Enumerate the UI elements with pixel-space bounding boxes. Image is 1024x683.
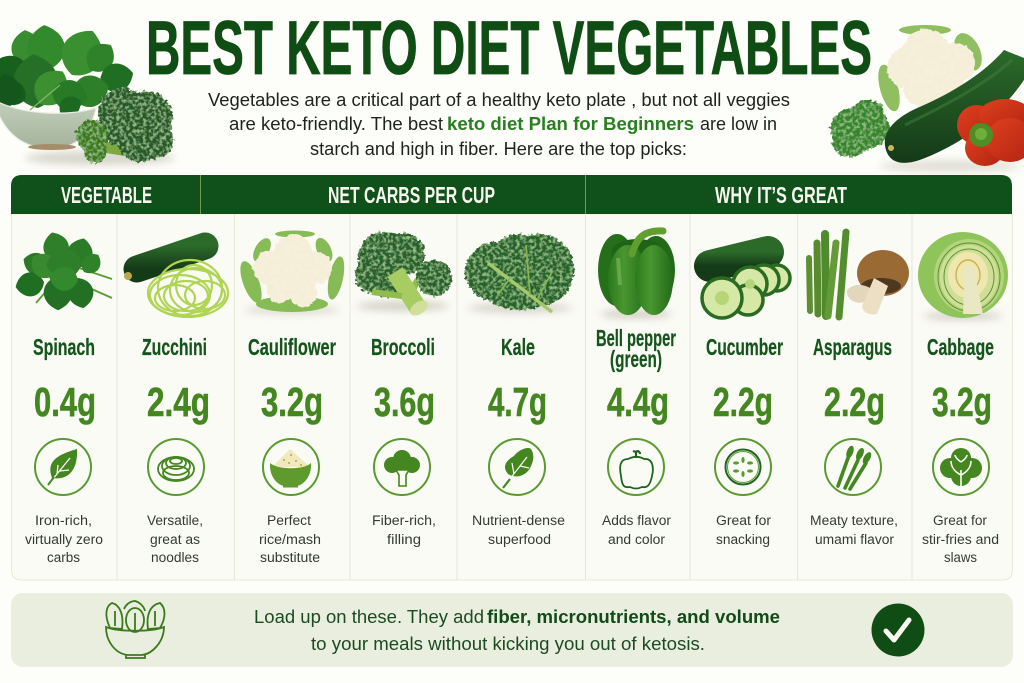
banner message: to your meals without kicking you out of ketosis. <box>311 634 705 654</box>
table header bar: NET CARBS PER CUP <box>328 182 495 208</box>
description: kale: Nutrient-dense <box>472 513 565 528</box>
description: broccoli: Fiber-rich, <box>372 513 436 528</box>
name: cabbage: Cabbage <box>927 334 994 360</box>
name: spinach: Spinach <box>33 334 95 360</box>
column: kale <box>465 234 574 547</box>
column: bell pepper <box>596 231 676 547</box>
value: cabbage: 3.2g <box>932 379 992 425</box>
icon: rice bowl <box>263 439 319 495</box>
description: cabbage: slaws <box>944 550 977 565</box>
icon: kale leaf <box>489 439 545 495</box>
icon: cabbage <box>933 439 989 495</box>
column: cauliflower <box>236 230 347 565</box>
photo: cucumber <box>702 252 790 318</box>
icon: leaf <box>35 439 91 495</box>
description: cauliflower: Perfect <box>267 513 311 528</box>
description: spinach: carbs <box>47 550 80 565</box>
description: zucchini <box>147 513 203 565</box>
value: cucumber: 2.2g <box>713 379 773 425</box>
icon: check mark <box>872 604 924 656</box>
photo: broccoli <box>355 232 452 319</box>
description: zucchini: noodles <box>151 550 199 565</box>
table header bar: WHY IT’S GREAT <box>715 182 847 208</box>
photo: cabbage half <box>918 232 1008 320</box>
name: cauliflower: Cauliflower <box>248 334 336 360</box>
column: cucumber <box>702 252 790 547</box>
description: cucumber <box>716 513 772 547</box>
description: zucchini: great as <box>150 532 200 547</box>
icon: pepper outline <box>608 439 664 495</box>
photo: cauliflower <box>236 230 347 314</box>
description: zucchini: Versatile, <box>147 513 203 528</box>
name: bell pepper: Bell pepper <box>596 325 676 351</box>
illustration: spinach bowl and broccoli <box>0 22 175 165</box>
description: asparagus <box>810 513 898 547</box>
description: bell pepper <box>602 513 672 547</box>
panel: vegetables table <box>11 175 1012 580</box>
description: cabbage: Great for <box>933 513 987 528</box>
description: cucumber: snacking <box>716 532 770 547</box>
icon: asparagus spears <box>825 439 881 495</box>
table header bar: VEGETABLE <box>61 182 152 208</box>
photo: zucchini <box>124 246 228 317</box>
icon: cucumber slice <box>715 439 771 495</box>
value: cauliflower: 3.2g <box>261 379 323 425</box>
description: broccoli: filling <box>387 532 421 547</box>
photo: spinach <box>14 229 112 310</box>
intro paragraph: are keto-friendly. The best <box>229 114 443 134</box>
description: cabbage: stir-fries and <box>922 532 999 547</box>
intro paragraph <box>208 90 790 159</box>
table body <box>12 214 1012 580</box>
name: bell pepper: (green) <box>610 346 662 372</box>
photo: kale <box>465 234 574 313</box>
name: bell pepper <box>596 325 676 372</box>
banner message <box>254 607 780 654</box>
description: spinach: virtually zero <box>25 532 103 547</box>
intro paragraph: Vegetables are a critical part of a healthy keto plate , but not all veggies <box>208 90 790 110</box>
intro paragraph: keto diet Plan for Beginners <box>447 114 694 134</box>
icon: salad bowl <box>106 601 164 658</box>
column: zucchini <box>124 246 228 565</box>
banner message: fiber, micronutrients, and volume <box>487 607 780 627</box>
description: bell pepper: and color <box>608 532 666 547</box>
table column dividers <box>117 214 912 580</box>
description: spinach: Iron-rich, <box>35 513 92 528</box>
icon: broccoli tree <box>374 439 430 495</box>
banner message: Load up on these. They add <box>254 607 484 627</box>
description: kale: superfood <box>488 532 551 547</box>
description: cauliflower: rice/mash <box>259 532 321 547</box>
name: zucchini: Zucchini <box>142 334 207 360</box>
description: cauliflower: substitute <box>260 550 320 565</box>
value: asparagus: 2.2g <box>824 379 885 425</box>
value: bell pepper: 4.4g <box>607 379 669 425</box>
icon: spiral noodles <box>148 439 204 495</box>
description: asparagus: umami flavor <box>815 532 895 547</box>
column: asparagus <box>809 232 909 547</box>
value: kale: 4.7g <box>488 379 547 425</box>
column: cabbage <box>918 232 1008 565</box>
photo: asparagus and mushroom <box>809 232 909 317</box>
illustration: cauliflower, kale, zucchini, red pepper <box>830 25 1024 172</box>
intro paragraph: are low in <box>700 114 777 134</box>
photo: green bell pepper <box>598 231 675 318</box>
intro paragraph: starch and high in fiber. Here are the top picks: <box>310 139 687 159</box>
description: bell pepper: Adds flavor <box>602 513 672 528</box>
description: cabbage <box>922 513 999 565</box>
name: broccoli: Broccoli <box>371 334 435 360</box>
name: asparagus: Asparagus <box>813 334 892 360</box>
description: kale <box>472 513 565 547</box>
description: cauliflower <box>259 513 321 565</box>
name: kale: Kale <box>501 334 535 360</box>
column: spinach <box>14 229 112 565</box>
value: spinach: 0.4g <box>34 379 96 425</box>
name: cucumber: Cucumber <box>706 334 783 360</box>
description: broccoli <box>372 513 436 547</box>
banner background <box>11 593 1013 667</box>
column: broccoli <box>355 232 452 547</box>
value: broccoli: 3.6g <box>374 379 435 425</box>
table header bar <box>11 175 1012 214</box>
description: cucumber: Great for <box>716 513 772 528</box>
callout: footer banner <box>11 593 1013 667</box>
value: zucchini: 2.4g <box>147 379 210 425</box>
description: asparagus: Meaty texture, <box>810 513 898 528</box>
description: spinach <box>25 513 103 565</box>
